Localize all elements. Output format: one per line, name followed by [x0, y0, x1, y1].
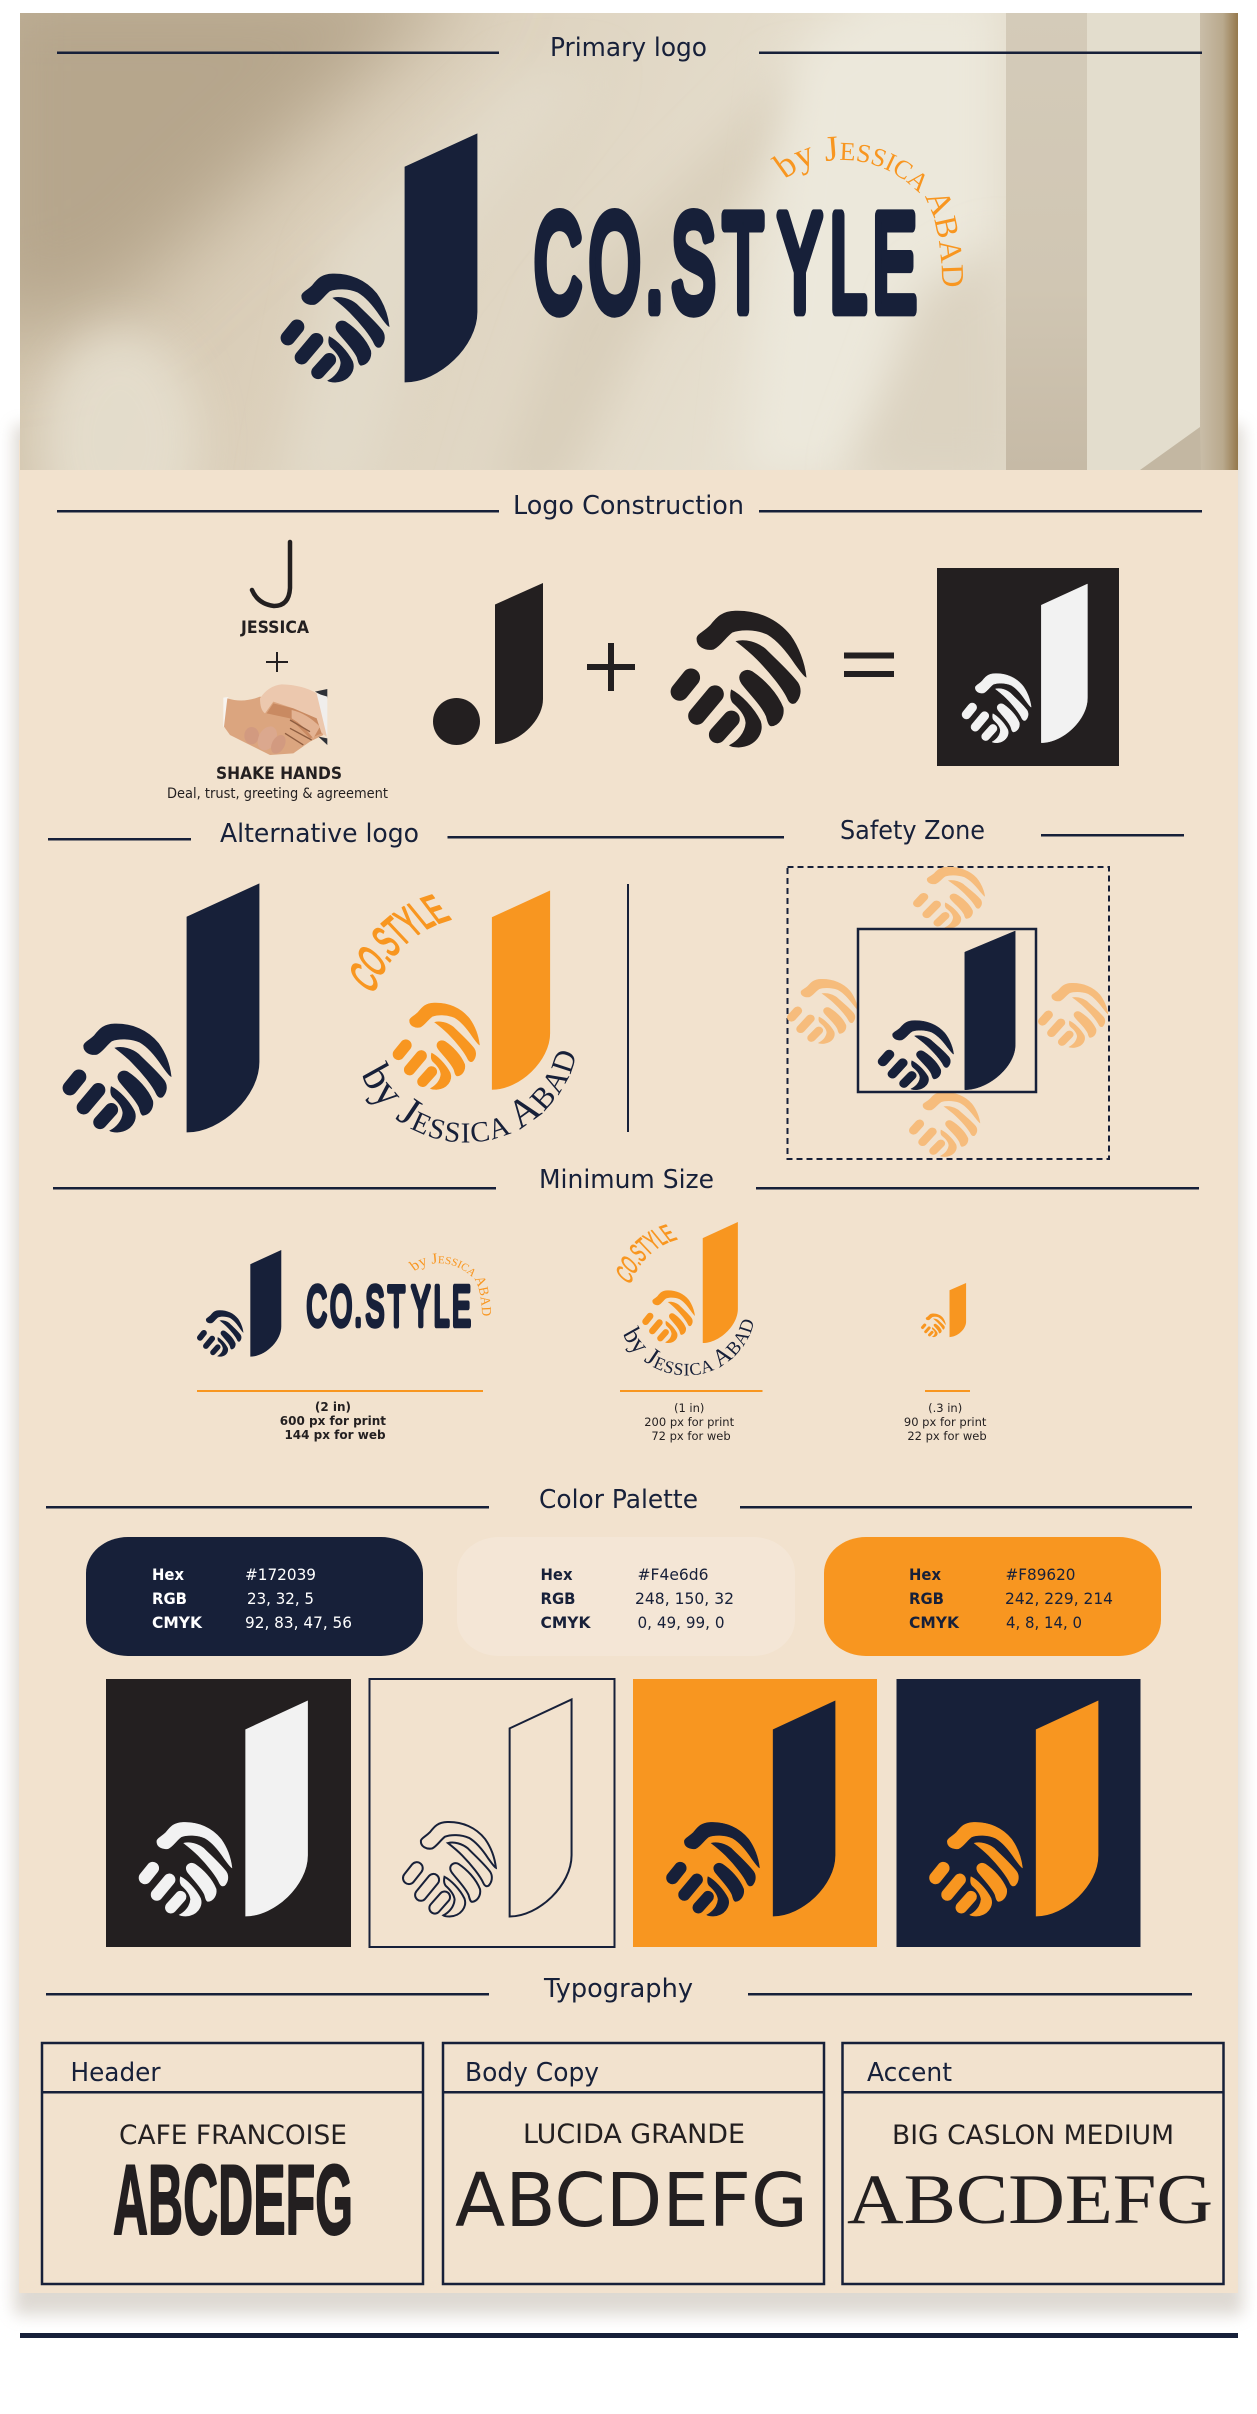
- minimum size: 1 inch logo: CO.STYLE: [616, 1224, 678, 1283]
- swatch: navy: CMYK: [152, 1613, 203, 1632]
- dashed outer boundary: [788, 867, 1109, 1159]
- minimum size: .3 inch logo: 22 px for web: [907, 1429, 987, 1443]
- type card: Header: CAFE FRANCOISE: [119, 2120, 347, 2151]
- swatch: navy: #172039: [245, 1565, 316, 1584]
- minimum size: 2 inch logo: by JESSICA ABAD: [408, 1253, 491, 1316]
- type card: Accent: ABCDEFG: [847, 2161, 1213, 2239]
- type card: Accent: [842, 2043, 1224, 2284]
- heading: Safety Zone: Safety Zone: [840, 816, 985, 846]
- minimum size: 1 inch logo: (1 in): [674, 1401, 704, 1415]
- minimum size: 1 inch logo: by JESSICA ABAD: [624, 1320, 753, 1376]
- minimum size: 1 inch logo: [616, 1222, 762, 1443]
- heading: Logo Construction: Logo Construction: [513, 491, 744, 521]
- swatch: cream: [457, 1537, 795, 1656]
- logo variant: white on black: [106, 1679, 351, 1947]
- heading: Primary logo: Primary logo: [550, 33, 707, 63]
- type card: Body Copy: ABCDEFG: [455, 2158, 808, 2244]
- alternative logo: stacked orange: CO.STYLE: [351, 894, 452, 991]
- logo variant: orange on navy: [896, 1679, 1140, 1947]
- photo: handshake: [223, 684, 327, 756]
- icon: plus: [587, 643, 635, 691]
- type card: Accent: Accent: [867, 2058, 952, 2088]
- panel shadow: [14, 425, 1243, 2315]
- minimum size: 2 inch logo: 144 px for web: [284, 1428, 386, 1442]
- safety zone diagram: [785, 867, 1109, 1159]
- minimum size: 1 inch logo: 200 px for print: [644, 1415, 735, 1429]
- swatch: navy: 23, 32, 5: [247, 1589, 314, 1608]
- logo variant: navy on orange: [633, 1679, 877, 1947]
- divider line: [627, 884, 629, 1132]
- icon: J letter stroke: [252, 542, 290, 606]
- panel: beige sheet: [19, 440, 1238, 2293]
- swatch: orange: #F89620: [1006, 1565, 1076, 1584]
- construction: concept column: [167, 542, 388, 802]
- heading: Minimum Size: Minimum Size: [539, 1165, 714, 1195]
- swatch: orange: 4, 8, 14, 0: [1006, 1613, 1082, 1632]
- pale hands around the logo: [785, 867, 1108, 1157]
- swatch: orange: Hex: [909, 1565, 942, 1584]
- construction: dot and J: [433, 583, 543, 745]
- type card: Header: ABCDEFG: [113, 2144, 353, 2255]
- swatch: orange: [824, 1537, 1161, 1656]
- alternative logo: stacked orange: [351, 890, 574, 1142]
- bottom rule: [20, 2333, 1238, 2338]
- swatch: navy: [86, 1537, 423, 1656]
- minimum size: .3 inch logo: [904, 1283, 990, 1443]
- heading: Alternative logo: Alternative logo: [220, 819, 419, 849]
- swatch: orange: CMYK: [909, 1613, 960, 1632]
- icon: primary logo mark: [278, 134, 477, 382]
- minimum size: 2 inch logo: 600 px for print: [280, 1414, 386, 1428]
- swatch: navy: RGB: [152, 1589, 187, 1608]
- logo on black square: [937, 568, 1119, 766]
- alternative logo: navy mark: [60, 884, 259, 1132]
- minimum size: .3 inch logo: 90 px for print: [904, 1415, 987, 1429]
- wordmark: primary CO.STYLE: by JESSICA ABAD: [770, 136, 963, 286]
- wordmark: primary CO.STYLE: CO.STYLE: [534, 186, 917, 339]
- text: SHAKE HANDS: SHAKE HANDS: [216, 764, 342, 784]
- type card: Body Copy: Body Copy: [465, 2058, 599, 2088]
- swatch: navy: Hex: [152, 1565, 185, 1584]
- minimum size: 2 inch logo: (2 in): [315, 1400, 351, 1414]
- logo variant: outline: [370, 1679, 614, 1947]
- text: JESSICA: JESSICA: [240, 618, 310, 638]
- panel: hero photo background: [20, 13, 1238, 470]
- logo in safety zone: [876, 931, 1015, 1090]
- icon: equals: [844, 656, 894, 674]
- type card: Body Copy: [443, 2043, 824, 2284]
- swatch: cream: RGB: [540, 1589, 576, 1608]
- minimum size: 1 inch logo: 72 px for web: [651, 1429, 731, 1443]
- type card: Header: [42, 2043, 423, 2284]
- swatch: navy: 92, 83, 47, 56: [245, 1613, 352, 1632]
- minimum size: .3 inch logo: (.3 in): [928, 1401, 962, 1415]
- icon: large handshake: [667, 611, 806, 747]
- swatch: cream: CMYK: [540, 1613, 591, 1632]
- text: meaning: Deal, trust, greeting & agreement: [167, 786, 388, 802]
- alternative logo: stacked orange: by JESSICA ABAD: [362, 1051, 574, 1142]
- type card: Header: Header: [70, 2058, 161, 2088]
- wordmark: primary CO.STYLE: [534, 136, 963, 339]
- icon: small plus: [266, 652, 288, 672]
- type card: Body Copy: LUCIDA GRANDE: [523, 2119, 745, 2150]
- swatch: cream: 0, 49, 99, 0: [638, 1613, 724, 1632]
- heading: Typography: Typography: [543, 1974, 693, 2004]
- swatch: orange: RGB: [909, 1589, 944, 1608]
- swatch: cream: 248, 150, 32: [635, 1589, 734, 1608]
- swatch: orange: 242, 229, 214: [1005, 1589, 1113, 1608]
- inner logo box: [858, 929, 1036, 1092]
- minimum size: 2 inch logo: CO.STYLE: [307, 1274, 471, 1338]
- type card: Accent: BIG CASLON MEDIUM: [892, 2120, 1174, 2151]
- heading: Color Palette: Color Palette: [539, 1485, 698, 1515]
- minimum size: 2 inch logo: [197, 1250, 491, 1442]
- swatch: cream: Hex: [540, 1565, 573, 1584]
- swatch: cream: #F4e6d6: [638, 1565, 708, 1584]
